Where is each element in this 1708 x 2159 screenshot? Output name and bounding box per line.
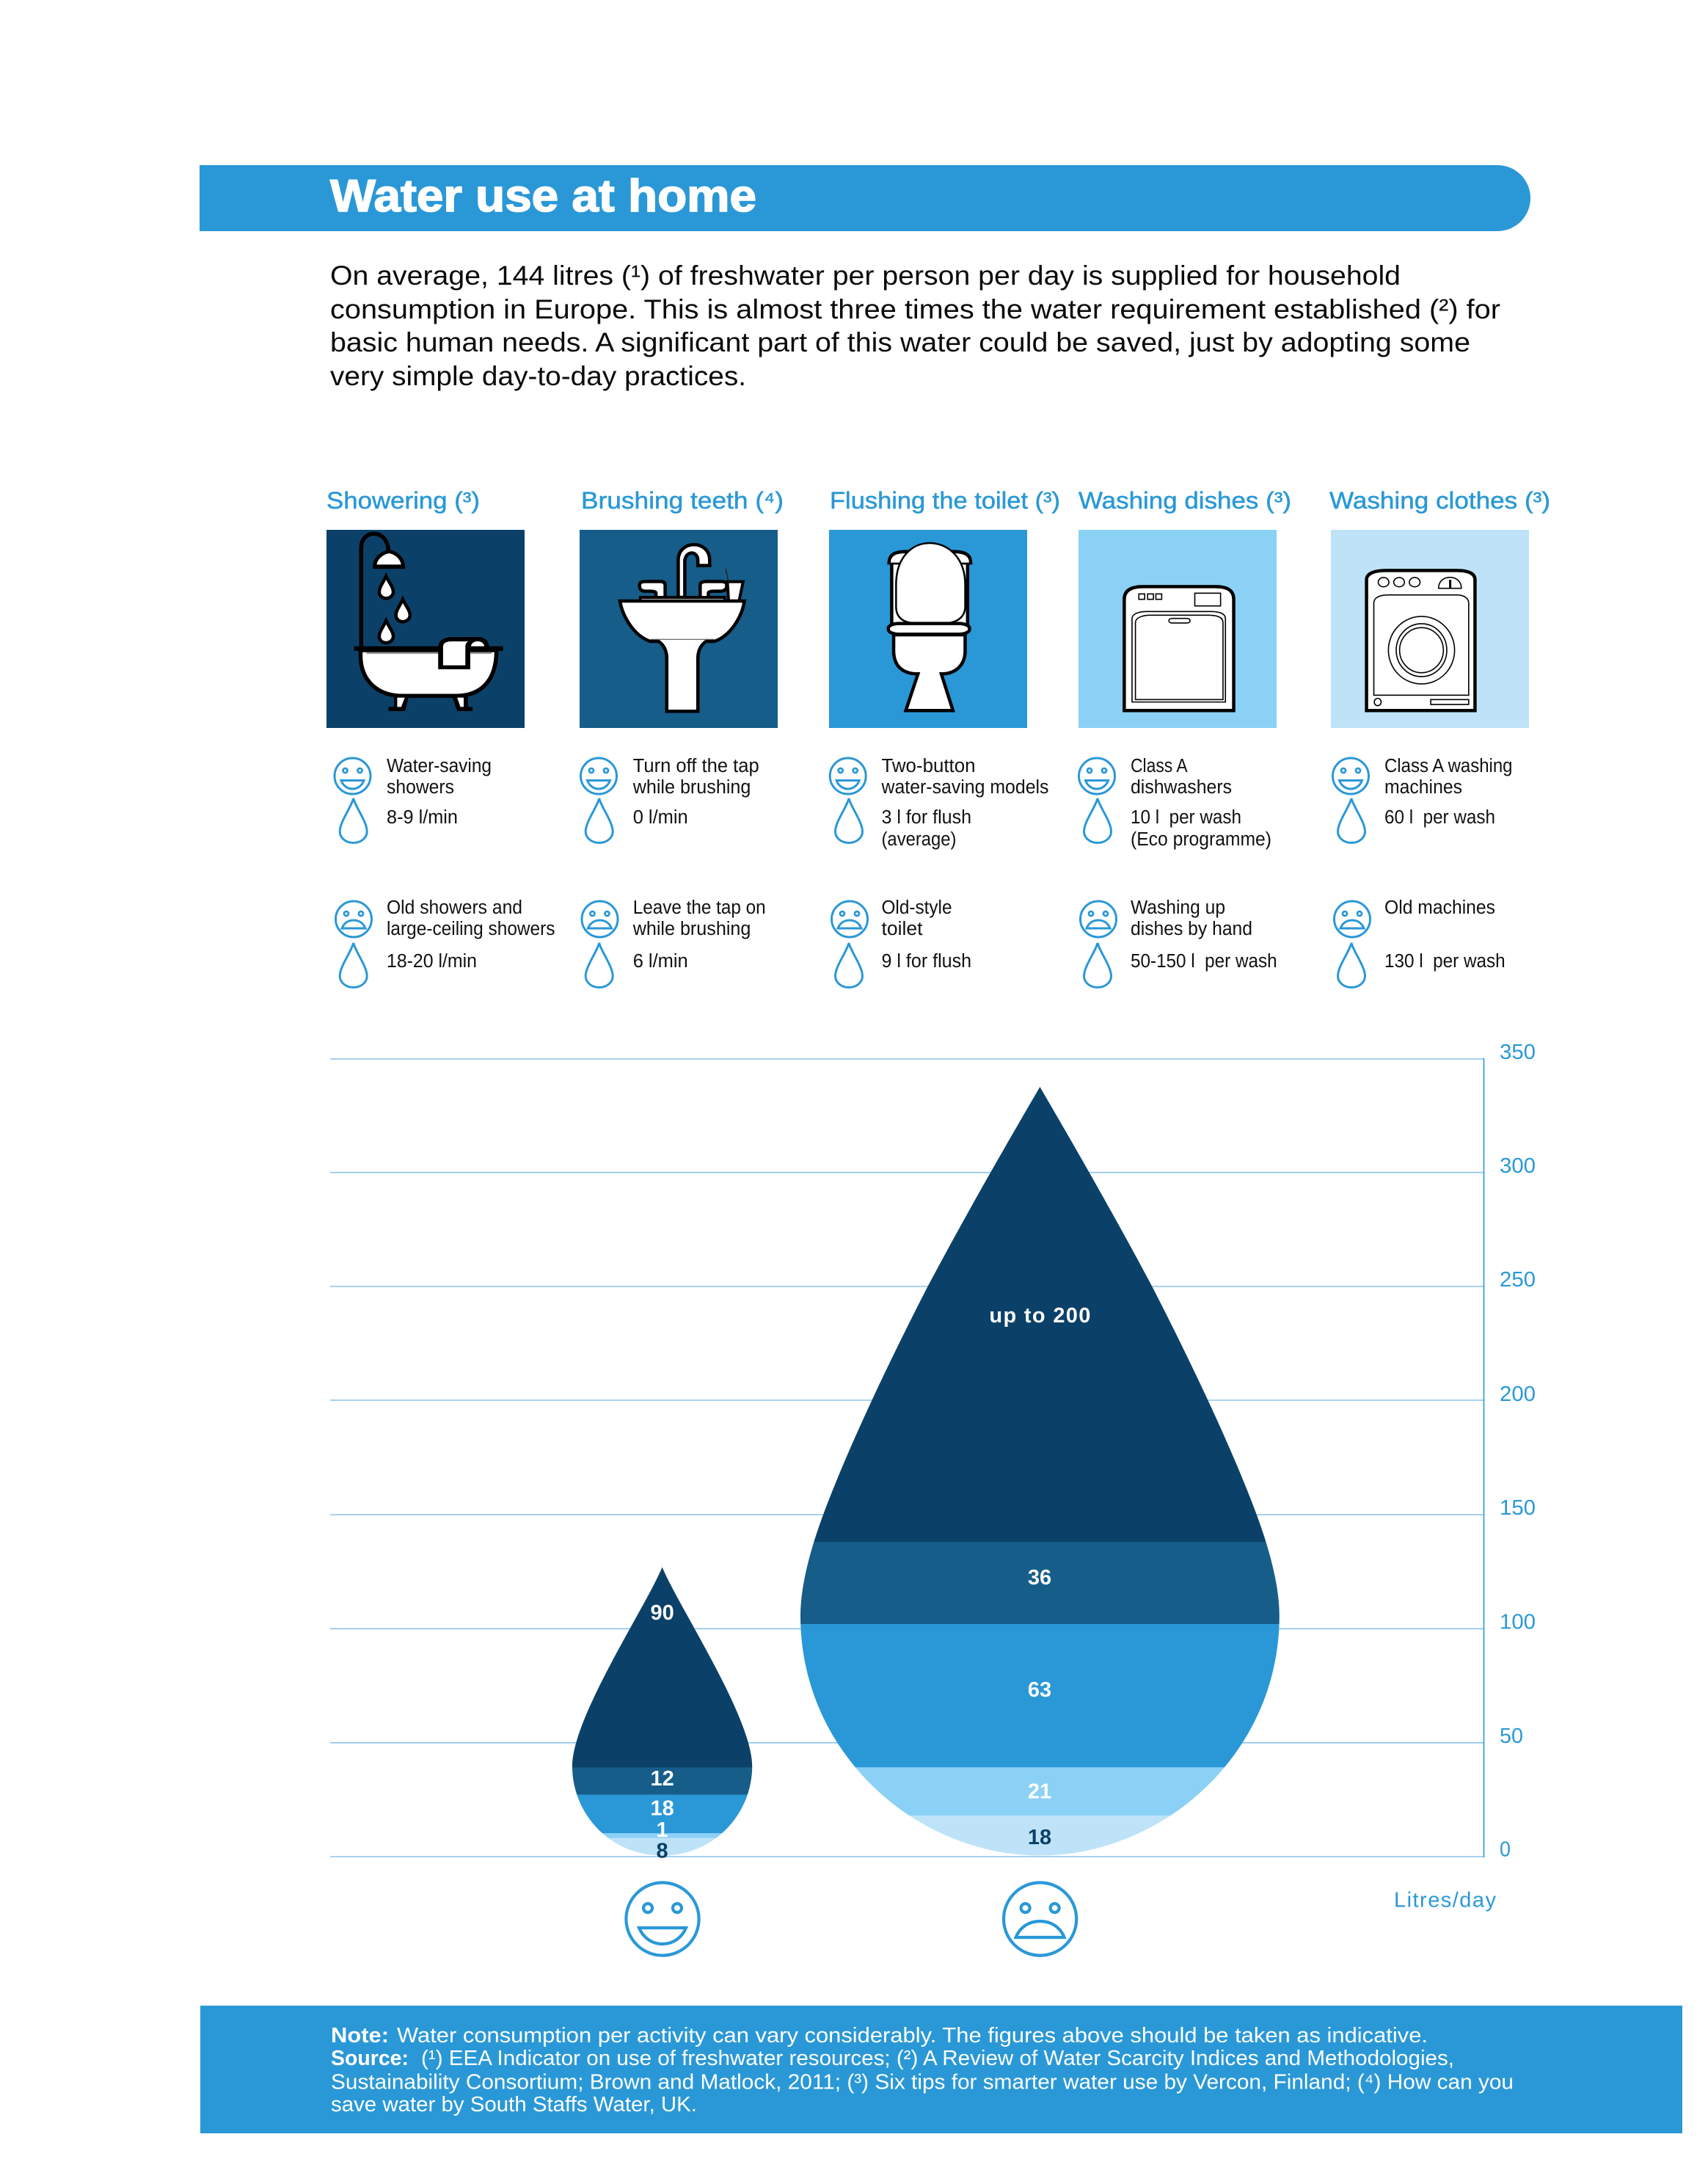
- tap off text: Turn off the tap: [633, 756, 759, 776]
- old machines text: [1384, 898, 1506, 972]
- value: up to 200: up to 200: [989, 1304, 1090, 1328]
- note and source panel: Source:: [331, 2047, 409, 2070]
- icon: happy face: [581, 758, 616, 794]
- value: 21: 21: [1028, 1780, 1051, 1804]
- chart: small water-saving drop: [569, 1563, 756, 1863]
- intro text: [330, 260, 1500, 391]
- heading: showering: Showering (³): [326, 487, 480, 514]
- chart: axis labels: 150: [1500, 1496, 1536, 1520]
- heading: washing clothes: Washing clothes (³): [1329, 487, 1550, 514]
- old showers text: Old showers and: [387, 898, 522, 918]
- icon: water drop: [585, 798, 613, 842]
- old toilet text: Old-style: [882, 898, 952, 918]
- chart: axis labels: 50: [1500, 1725, 1523, 1748]
- old toilet text: [882, 898, 971, 972]
- tap on text: Leave the tap on: [633, 898, 766, 918]
- heading: washing dishes: Washing dishes (³): [1079, 487, 1291, 514]
- old machines text: Old machines: [1384, 898, 1495, 918]
- tap off text: [632, 756, 759, 828]
- class A washing machines text: machines: [1384, 777, 1462, 798]
- value: 18: 18: [650, 1796, 674, 1820]
- tile: toilet icon: [829, 530, 1027, 728]
- tile: bath and shower icon: [326, 530, 525, 728]
- tap on text: 6 l/min: [633, 951, 688, 972]
- tap on text: while brushing: [632, 919, 751, 939]
- tile: wash basin icon: [580, 530, 778, 728]
- chart: axis and gridlines: [330, 1058, 1483, 1857]
- tips: washing clothes: [1332, 756, 1513, 988]
- chart: axis labels: 0: [1500, 1838, 1511, 1861]
- two-button toilet text: 3 l for flush: [882, 807, 971, 828]
- icon: water drop: [1084, 798, 1111, 842]
- washing by hand text: [1131, 898, 1277, 972]
- value: 12: 12: [650, 1767, 674, 1791]
- note and source panel: Water consumption per activity can vary considerably. The figures above should be taken as indicative.: [397, 2024, 1428, 2047]
- tap on text: [632, 898, 766, 972]
- icon: sad face: [832, 901, 867, 937]
- efficient showers text: [387, 756, 492, 828]
- old toilet text: toilet: [882, 919, 923, 939]
- old machines text: 130 l per wash: [1384, 951, 1506, 972]
- title banner: [200, 165, 1530, 231]
- class A dishwashers text: 10 l per wash: [1131, 807, 1241, 828]
- value: 8: 8: [657, 1840, 668, 1863]
- value: 90: 90: [650, 1601, 674, 1625]
- washing by hand text: Washing up: [1131, 898, 1225, 918]
- icon: large happy face: [626, 1882, 699, 1956]
- chart: axis labels: 300: [1500, 1154, 1536, 1178]
- class A dishwashers text: Class A: [1131, 756, 1188, 776]
- title banner: Water use at home: [330, 171, 756, 222]
- efficient showers text: 8-9 l/min: [387, 807, 458, 828]
- chart: axis labels: [1500, 1041, 1536, 1861]
- icon: water drop: [340, 798, 367, 842]
- washing by hand text: dishes by hand: [1131, 919, 1252, 939]
- tap off text: while brushing: [632, 777, 751, 798]
- class A washing machines text: 60 l per wash: [1384, 807, 1495, 828]
- intro text: On average, 144 litres (¹) of freshwater per person per day is supplied for household: [330, 260, 1401, 291]
- value: 36: 36: [1028, 1566, 1051, 1590]
- icon: large sad face: [1004, 1882, 1076, 1956]
- icon: water drop: [1338, 943, 1365, 988]
- intro text: consumption in Europe. This is almost three times the water requirement established (²) for: [330, 294, 1500, 324]
- chart: axis labels: 100: [1500, 1610, 1536, 1634]
- note and source panel: Note:: [331, 2024, 389, 2047]
- old showers text: large-ceiling showers: [387, 919, 555, 939]
- two-button toilet text: [881, 756, 1049, 850]
- class A washing machines text: [1384, 756, 1513, 828]
- icon: water drop: [835, 943, 863, 988]
- efficient showers text: showers: [387, 777, 454, 798]
- note and source panel: (¹) EEA Indicator on use of freshwater resources; (²) A Review of Water Scarcity Indices and Methodologies,: [421, 2047, 1454, 2070]
- icon: happy face: [830, 758, 866, 794]
- icon: sad face: [1334, 901, 1371, 937]
- tap off text: 0 l/min: [633, 807, 688, 828]
- icon: sad face: [582, 901, 618, 937]
- tips: washing dishes: [1079, 756, 1277, 988]
- icon: happy face: [1332, 758, 1369, 794]
- icon: happy face: [1079, 758, 1115, 794]
- icon: happy face: [335, 758, 371, 794]
- two-button toilet text: (average): [882, 829, 957, 850]
- note and source panel: save water by South Staffs Water, UK.: [331, 2093, 697, 2116]
- old showers text: [387, 898, 555, 972]
- tile: dishwasher icon: [1079, 530, 1277, 728]
- class A washing machines text: Class A washing: [1384, 756, 1513, 776]
- icon: sad face: [336, 901, 371, 937]
- note and source panel: Sustainability Consortium; Brown and Matlock, 2011; (³) Six tips for smarter water use by Vercon, Finland; (⁴) How can you: [331, 2071, 1514, 2094]
- icon: water drop: [1084, 943, 1111, 988]
- axis unit: litres per day: Litres/day: [1394, 1889, 1497, 1912]
- old toilet text: 9 l for flush: [882, 951, 971, 972]
- note and source panel: [200, 2006, 1682, 2133]
- tips: flushing the toilet: [830, 756, 1049, 988]
- chart: axis labels: 350: [1500, 1041, 1536, 1064]
- class A dishwashers text: [1131, 756, 1271, 850]
- old showers text: 18-20 l/min: [387, 951, 477, 972]
- washing by hand text: 50-150 l per wash: [1131, 951, 1277, 972]
- value: 18: 18: [1028, 1826, 1051, 1849]
- intro text: very simple day-to-day practices.: [330, 360, 746, 391]
- icon: water drop: [585, 943, 613, 988]
- tips: brushing teeth: [581, 756, 766, 988]
- two-button toilet text: Two-button: [882, 756, 976, 776]
- chart: axis labels: 200: [1500, 1383, 1536, 1406]
- intro text: basic human needs. A significant part of this water could be saved, just by adopting some: [330, 327, 1470, 357]
- heading: flushing the toilet: Flushing the toilet (³): [830, 487, 1060, 514]
- icon: water drop: [835, 798, 863, 842]
- heading: brushing teeth: Brushing teeth (⁴): [581, 487, 784, 514]
- tips: showering: [335, 756, 555, 988]
- icon: sad face: [1080, 901, 1117, 937]
- value: 1: 1: [657, 1818, 668, 1842]
- class A dishwashers text: (Eco programme): [1131, 829, 1271, 850]
- chart: axis labels: 250: [1500, 1268, 1536, 1292]
- two-button toilet text: water-saving models: [881, 777, 1049, 798]
- icon: water drop: [1338, 798, 1365, 842]
- class A dishwashers text: dishwashers: [1131, 777, 1232, 798]
- tile: washing machine icon: [1331, 530, 1529, 728]
- value: 63: 63: [1028, 1678, 1051, 1702]
- icon: water drop: [340, 943, 367, 988]
- chart: large wasteful drop: [796, 1085, 1284, 1857]
- efficient showers text: Water-saving: [387, 756, 492, 776]
